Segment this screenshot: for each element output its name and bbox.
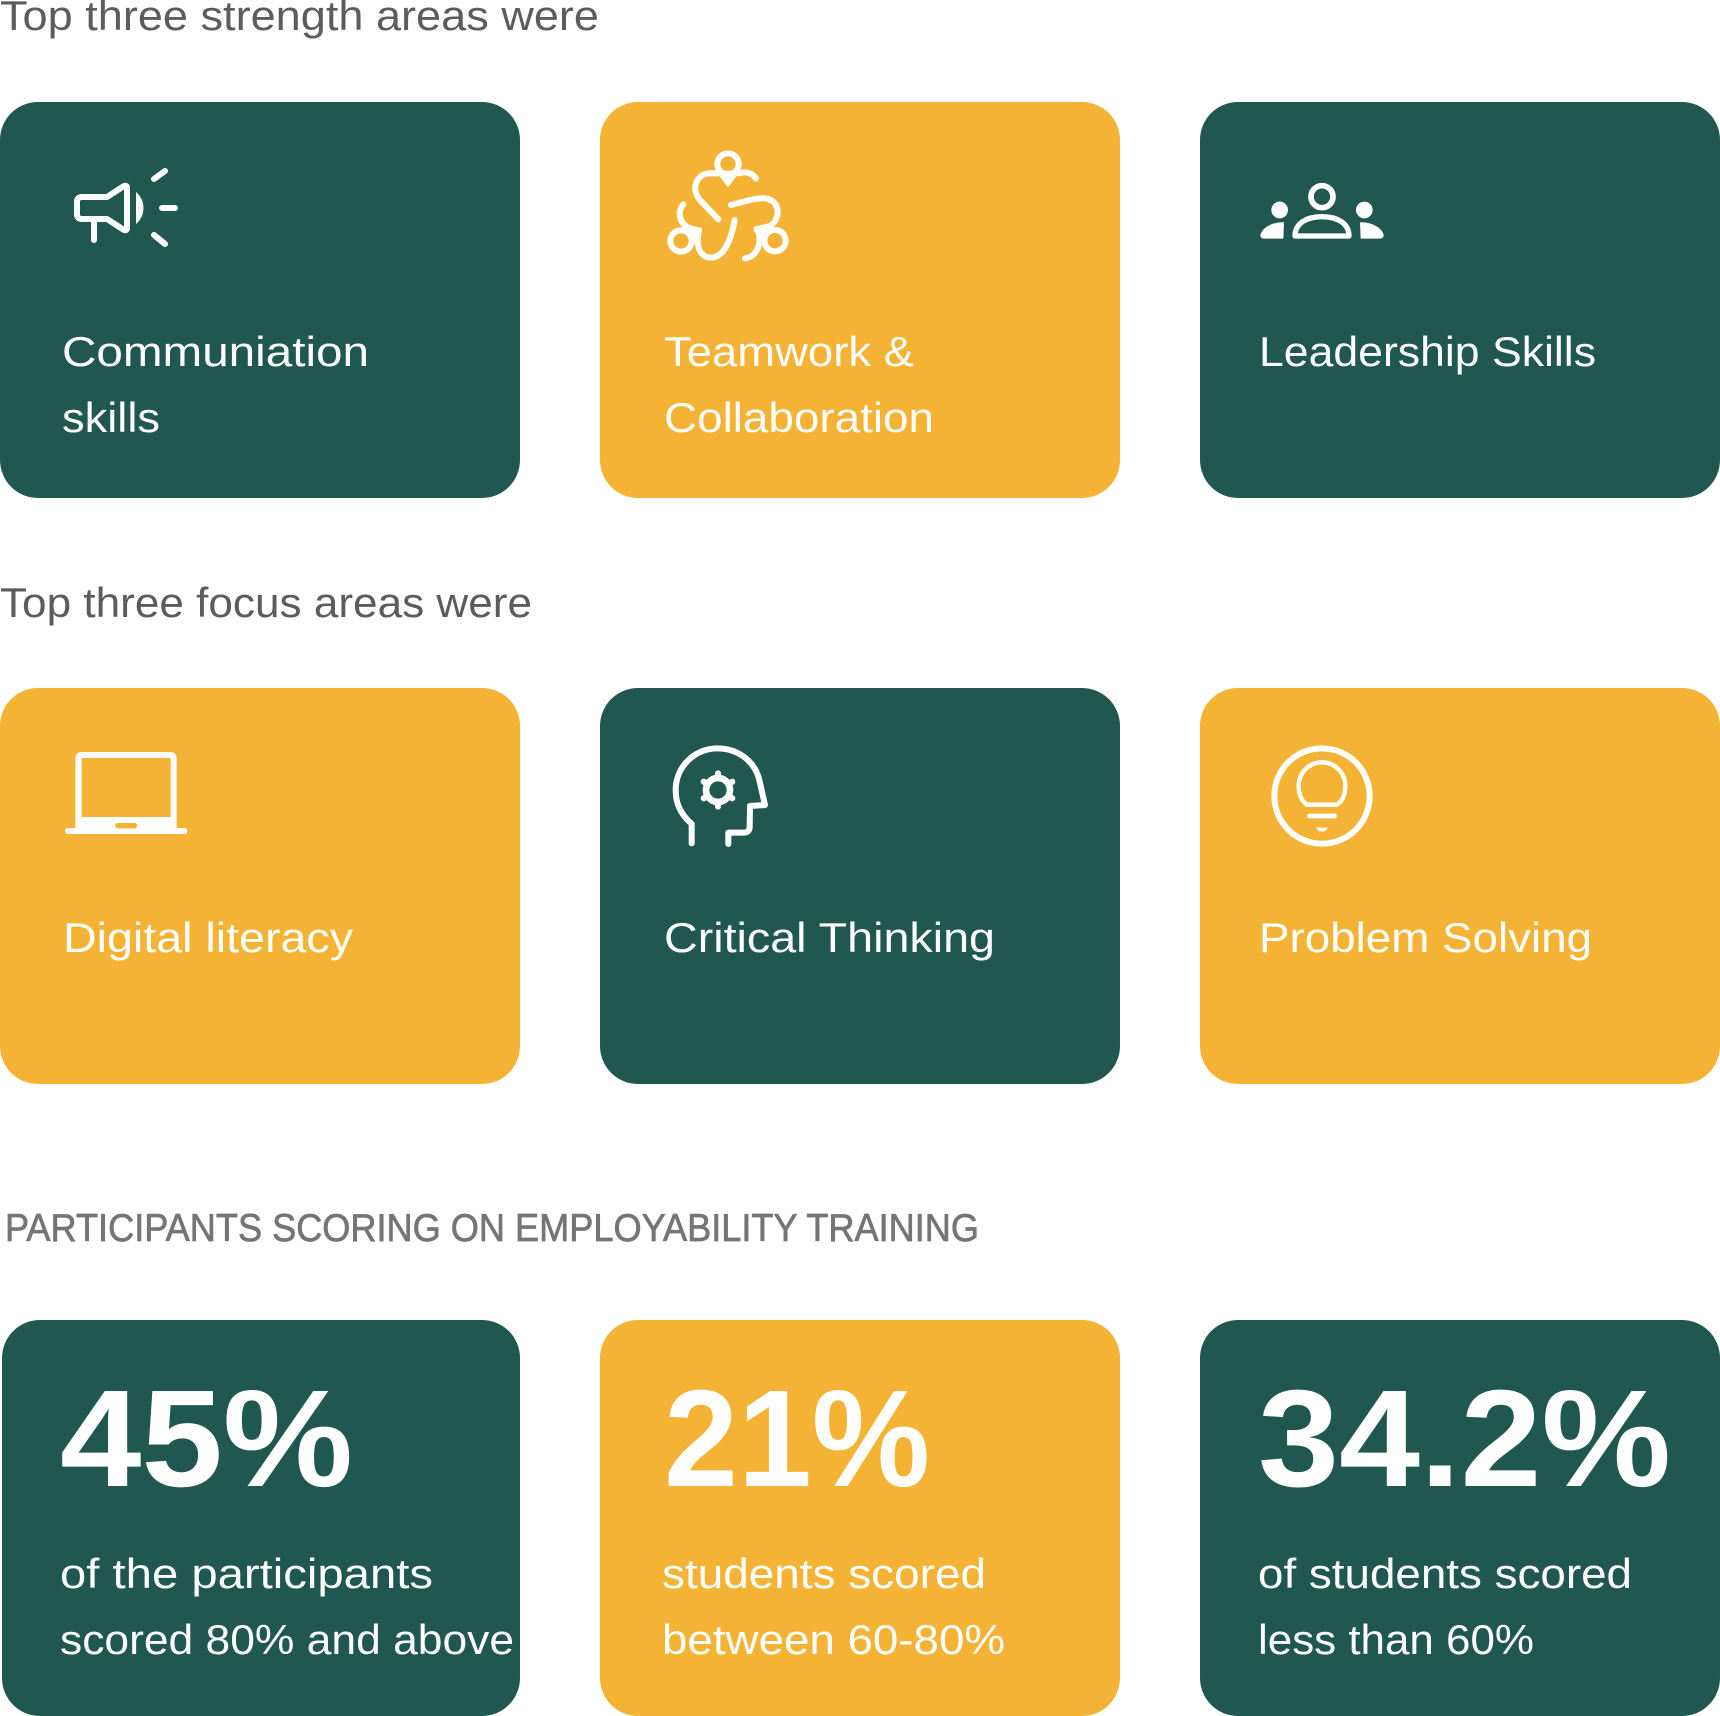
description: of the participants [60,1550,433,1597]
icon: head with gear [676,748,765,844]
panel: 45 percent [2,1320,520,1716]
description [662,1550,1005,1663]
label: Critical Thinking [664,914,995,961]
panel: 21 percent [600,1320,1120,1716]
icon: megaphone [77,171,175,244]
icon: light bulb [1274,748,1370,844]
panel: problem solving [1200,688,1720,1084]
panel: leadership skills [1200,102,1720,498]
description: students scored [662,1550,986,1597]
panel: communication skills [0,102,520,498]
panel: teamwork and collaboration [600,102,1120,498]
panel: 34.2 percent [1200,1320,1720,1716]
label: Problem Solving [1259,914,1592,961]
stat: 21% [664,1362,930,1516]
label: Communiation [62,328,369,375]
heading: top three focus areas: Top three focus areas were [0,579,532,626]
icon: laptop [65,752,187,834]
description [1258,1550,1632,1663]
description: between 60-80% [662,1616,1005,1663]
icon: people group [1260,186,1384,239]
description [60,1550,514,1663]
label: Collaboration [664,394,934,441]
description: of students scored [1258,1550,1632,1597]
stat: 45% [60,1362,353,1516]
label [664,328,934,441]
description: scored 80% and above [60,1616,514,1663]
label: Teamwork & [664,328,914,375]
label: skills [62,394,160,441]
stat: 34.2% [1258,1362,1671,1516]
panel: digital literacy [0,688,520,1084]
icon: teamwork [670,153,786,258]
heading: participants scoring: PARTICIPANTS SCORING ON EMPLOYABILITY TRAINING [5,1207,979,1250]
label: Digital literacy [63,914,353,961]
panel: critical thinking [600,688,1120,1084]
label [62,328,369,441]
description: less than 60% [1258,1616,1534,1663]
label: Leadership Skills [1259,328,1596,375]
